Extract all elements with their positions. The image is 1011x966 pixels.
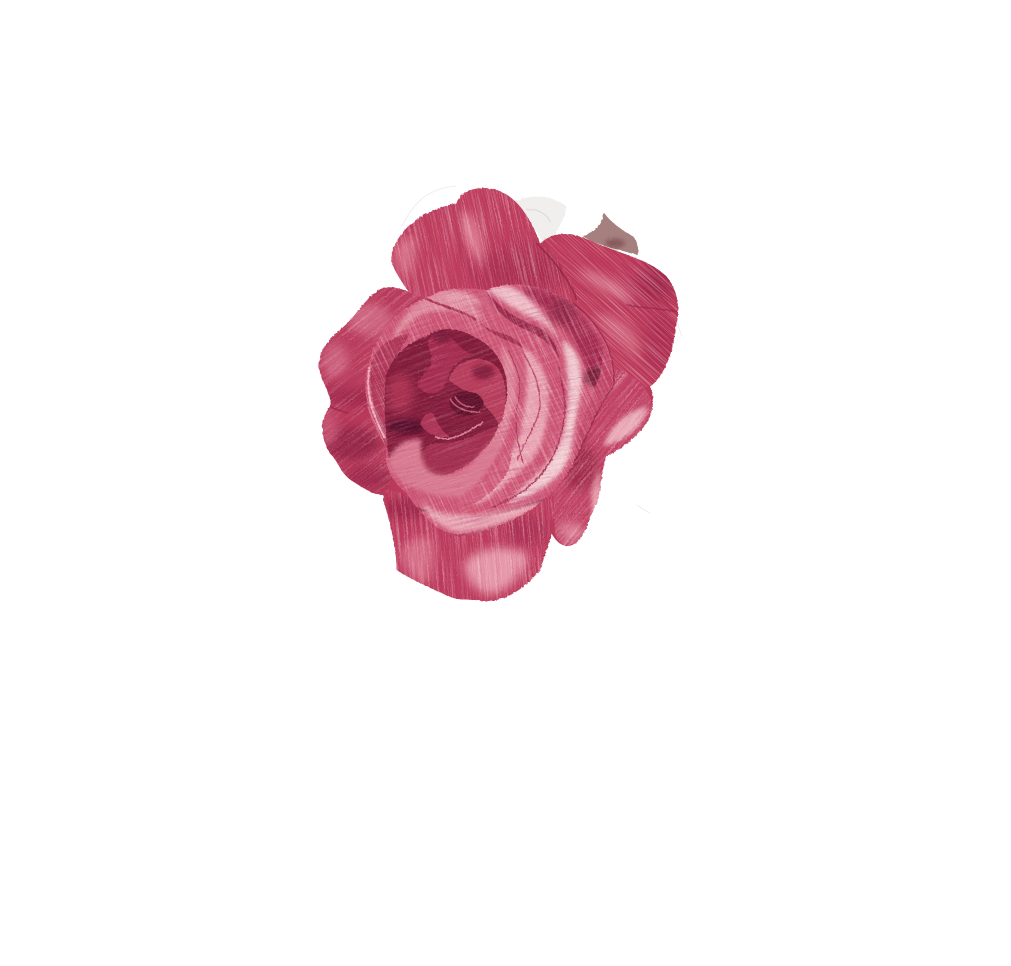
pale band: right bbox=[507, 340, 581, 505]
shadow band: upper right bbox=[522, 286, 607, 370]
inner fold: upper center bbox=[448, 359, 506, 425]
petal: bottom bbox=[382, 490, 554, 602]
petal: top bbox=[391, 188, 578, 304]
faint white sketched leaf behind rose bbox=[513, 197, 567, 243]
base silhouette bbox=[318, 188, 678, 601]
mid band: right of shadow bbox=[573, 347, 612, 463]
outer petals bbox=[318, 188, 679, 602]
dark fold lines bbox=[492, 367, 565, 508]
pale rim: bottom bbox=[420, 500, 547, 533]
illustration canvas bbox=[318, 186, 682, 602]
petal: right bbox=[544, 234, 679, 388]
inner fold: left curl bbox=[417, 333, 473, 394]
pale ring around cavity bbox=[457, 450, 511, 505]
petal streak texture bbox=[365, 284, 614, 537]
cavity streak texture bbox=[368, 286, 610, 534]
inner fold: nose bbox=[420, 413, 450, 437]
ring edge shadow around bloom bbox=[573, 303, 614, 463]
dark fold: upper wedge bbox=[487, 292, 560, 360]
dark rim: left bbox=[370, 333, 410, 453]
pale band: upper bbox=[484, 284, 562, 340]
center bloom mass bbox=[365, 284, 614, 537]
inner cavity bbox=[385, 329, 507, 476]
pale band: upper left bbox=[391, 290, 484, 340]
pale petal: lower left of cavity bbox=[388, 430, 502, 497]
petal: left bbox=[318, 287, 424, 492]
faint pencil lines bbox=[402, 186, 682, 513]
inner spiral bbox=[450, 391, 483, 415]
rose bbox=[318, 186, 682, 602]
brown leaf behind rose bbox=[583, 213, 638, 255]
inner fold: lower curl bbox=[422, 426, 498, 474]
petal: lower right bbox=[548, 368, 653, 546]
